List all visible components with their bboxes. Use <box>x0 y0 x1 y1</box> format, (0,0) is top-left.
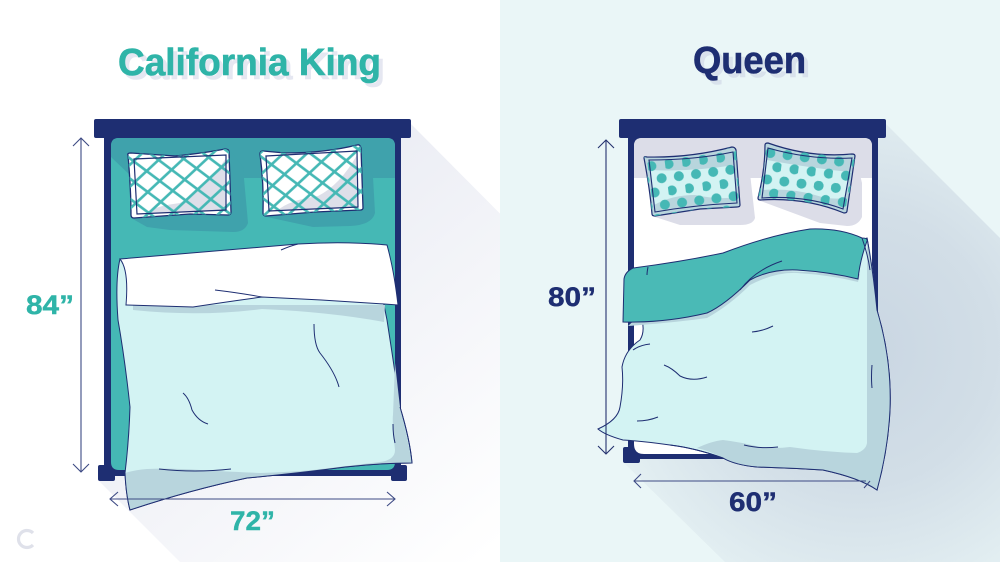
wrinkles <box>633 238 872 448</box>
California King bed <box>94 119 412 510</box>
dimension label: 72 inches: 72” <box>230 506 275 536</box>
dimension arrow: 80 inches <box>598 140 614 454</box>
cast shadow: California King bed <box>98 124 560 562</box>
dimension label: 84 inches: 84” <box>26 290 74 320</box>
duvet fold shade <box>125 363 412 510</box>
pillow: lattice left <box>128 149 231 218</box>
dimension arrow: 60 inches <box>634 474 870 488</box>
teal folded sheet <box>623 229 867 322</box>
duvet outline <box>670 238 890 490</box>
duvet <box>598 238 890 490</box>
folded white sheet <box>120 243 398 307</box>
pillow: lattice right <box>260 145 363 216</box>
bed frame <box>98 130 407 481</box>
pillow: dotted right <box>758 143 855 213</box>
duvet hem outline <box>125 407 412 510</box>
mattress <box>111 138 395 470</box>
duvet <box>117 259 412 510</box>
duvet fold shade <box>697 240 890 490</box>
panel: Queen background <box>500 0 1000 562</box>
dimension label: 60 inches: 60” <box>729 487 777 517</box>
dimension arrow: 84 inches <box>73 138 89 472</box>
mattress <box>634 138 872 454</box>
headboard <box>94 119 411 138</box>
title: California King: California King <box>118 42 381 84</box>
cast shadow: Queen bed <box>623 124 1000 562</box>
Queen bed <box>598 119 890 490</box>
mattress head shade <box>111 138 395 178</box>
dimension arrow: 72 inches <box>110 492 395 506</box>
pillow shadows <box>652 150 862 226</box>
headboard <box>619 119 886 138</box>
logo <box>18 530 33 548</box>
pillow shadows <box>131 145 375 232</box>
dimension label: 80 inches: 80” <box>548 282 596 312</box>
title: Queen: Queen <box>693 40 806 82</box>
sheet fold shadow <box>628 270 860 326</box>
bed frame <box>623 130 878 463</box>
pillow: dotted left <box>644 147 740 216</box>
title: California King: California King <box>122 46 385 88</box>
mattress head shade <box>634 138 872 178</box>
sheet fold shadow <box>133 305 385 322</box>
wrinkles <box>159 244 395 471</box>
title: Queen: Queen <box>697 44 810 86</box>
